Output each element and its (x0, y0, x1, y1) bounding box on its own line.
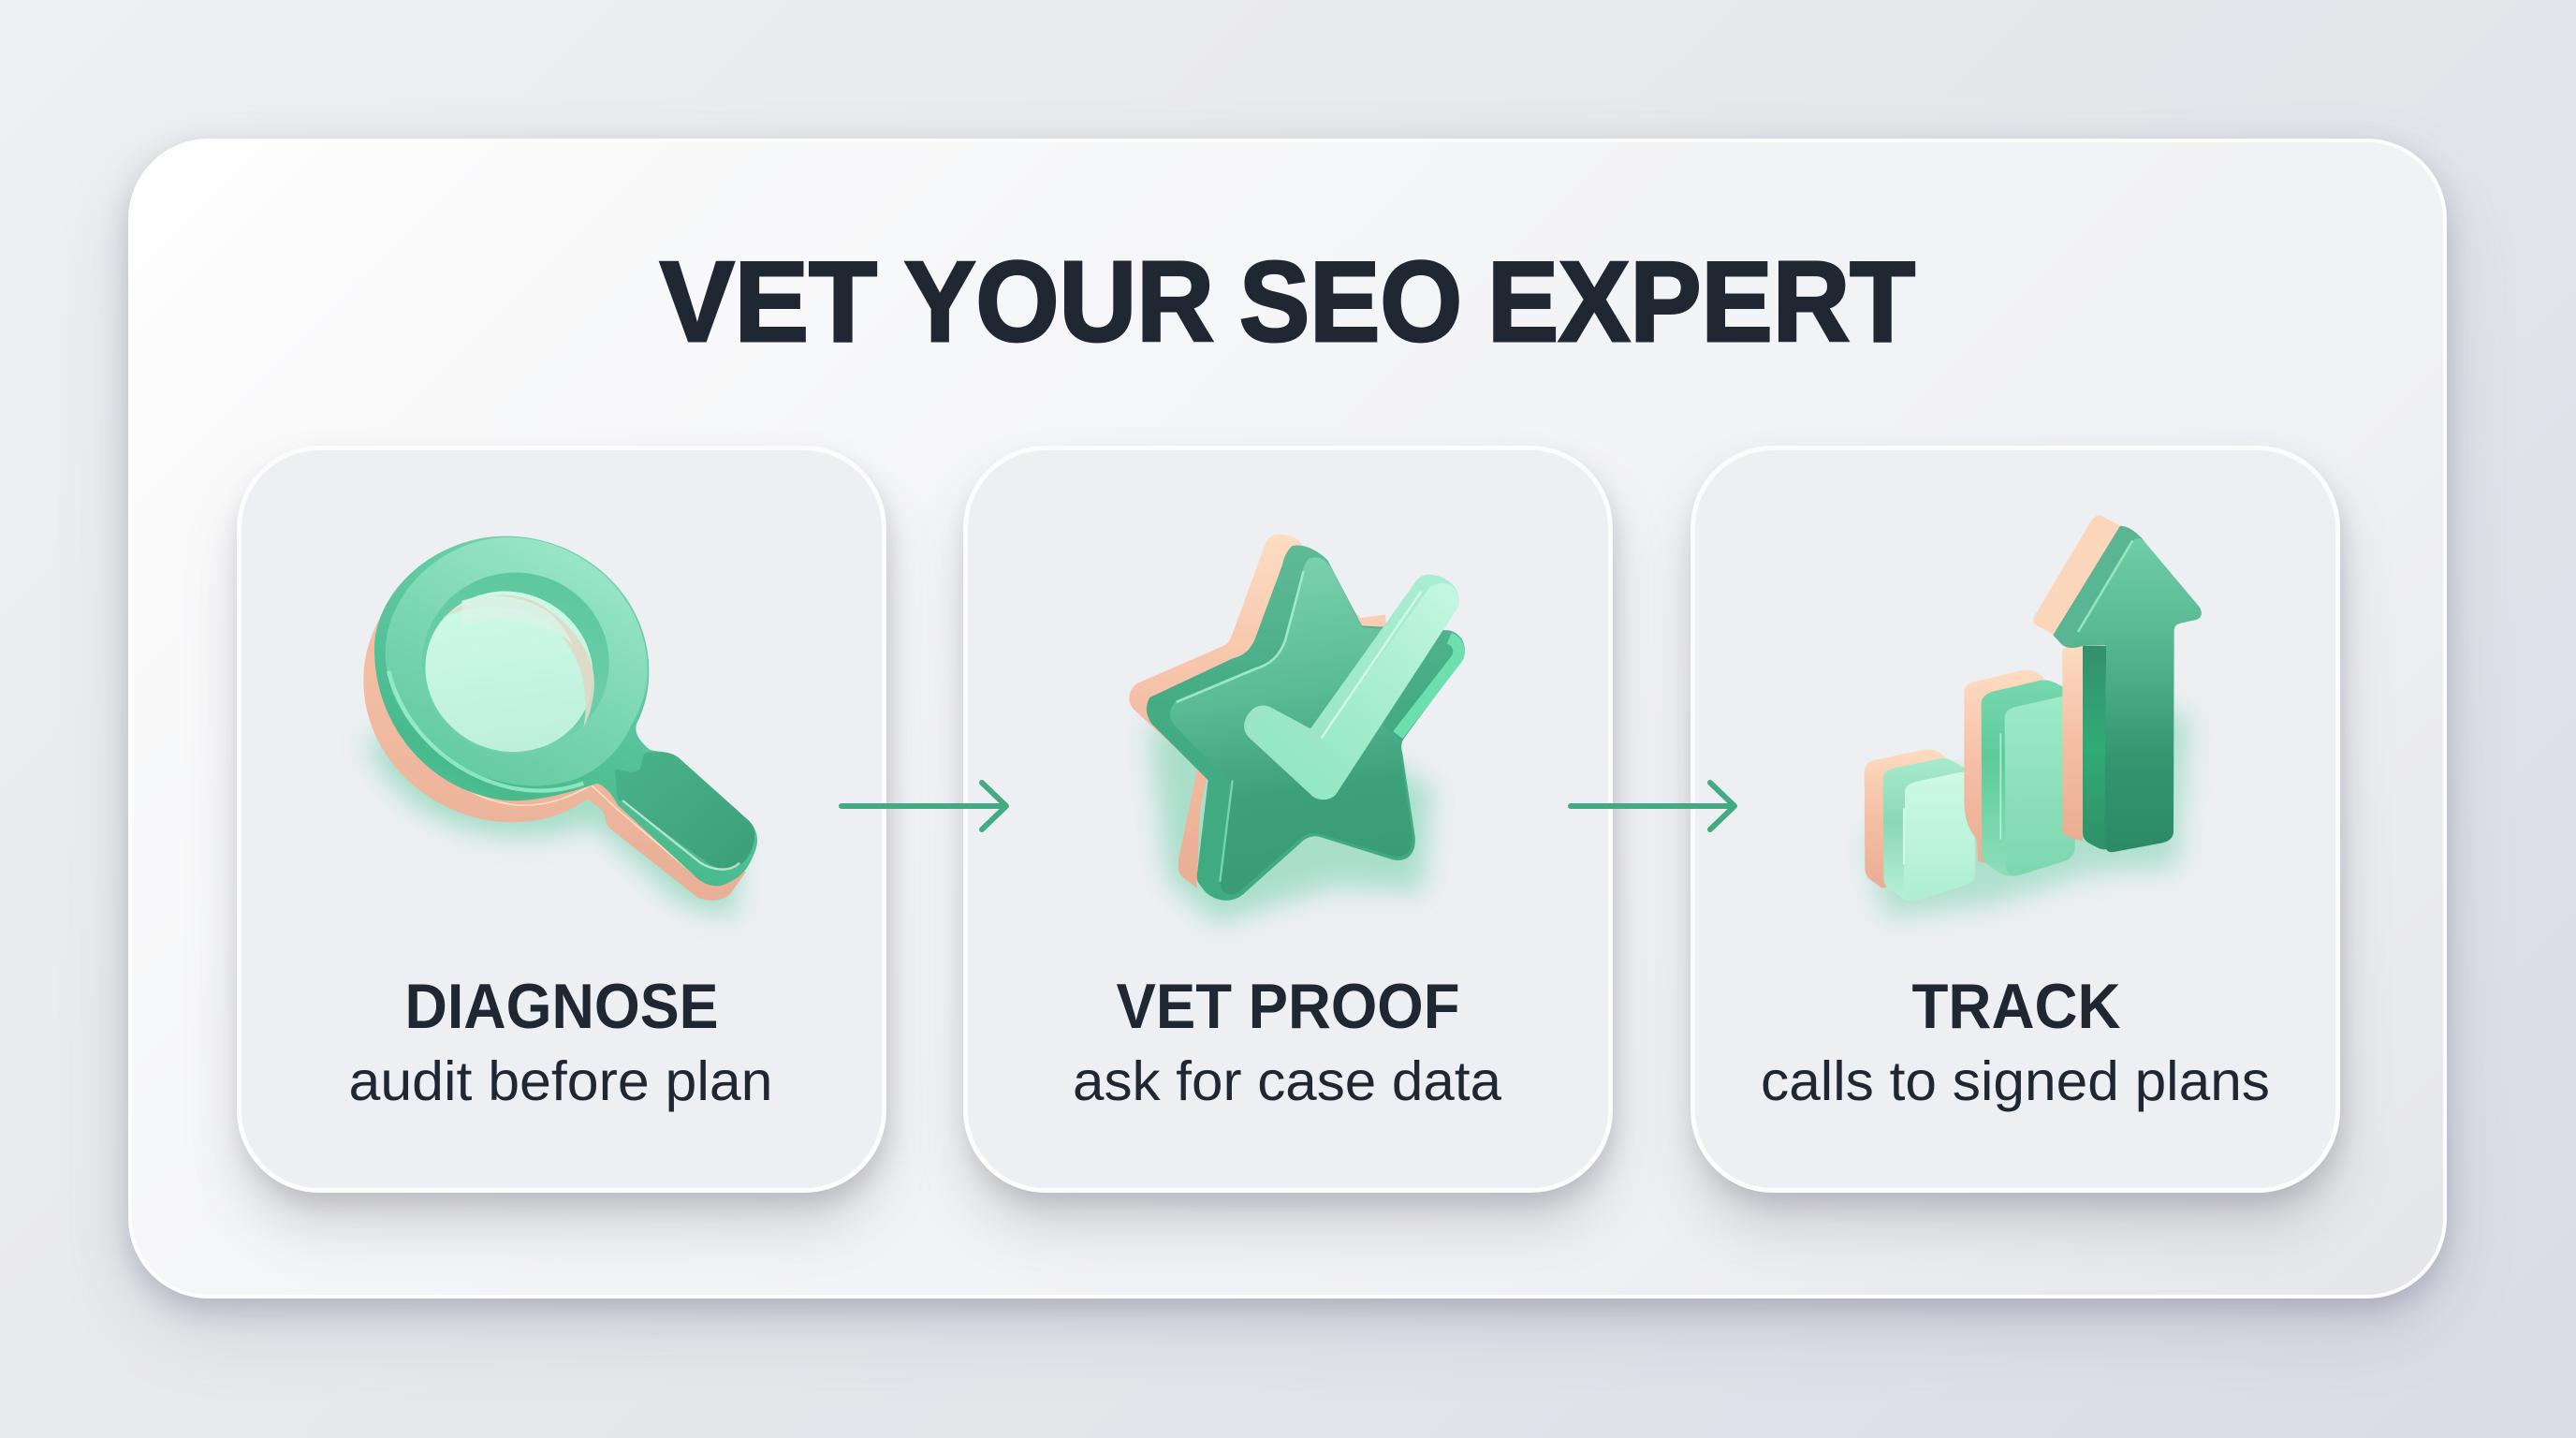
title: SEO (1239, 238, 1462, 365)
bar small (1865, 749, 1975, 901)
arrow: diagnose to vet proof (842, 783, 1006, 829)
heading: diagnose: DIAGNOSE (404, 971, 719, 1042)
icon: magnifying glass (363, 536, 757, 917)
title (660, 238, 1915, 365)
heading: track: TRACK (1911, 971, 2121, 1042)
text: vet proof caption: ask for case data (1073, 1050, 1501, 1112)
panel: vet proof card (963, 446, 1613, 1193)
title: VET (660, 238, 877, 365)
tall arrow (2033, 516, 2202, 852)
text: track caption: calls to signed plans (1761, 1050, 2270, 1112)
text: diagnose caption: audit before plan (348, 1050, 773, 1112)
panel: track card (1690, 446, 2340, 1193)
bar medium (1964, 669, 2075, 876)
panel: main container (128, 139, 2447, 1299)
panel: diagnose card (237, 446, 886, 1193)
icon: rising bars and arrow (1865, 516, 2202, 917)
icon: star with check (1129, 535, 1465, 924)
heading: vet proof: VET PROOF (1116, 971, 1460, 1042)
arrow: vet proof to track (1571, 783, 1734, 829)
title: YOUR (904, 238, 1214, 365)
title: EXPERT (1487, 238, 1915, 365)
